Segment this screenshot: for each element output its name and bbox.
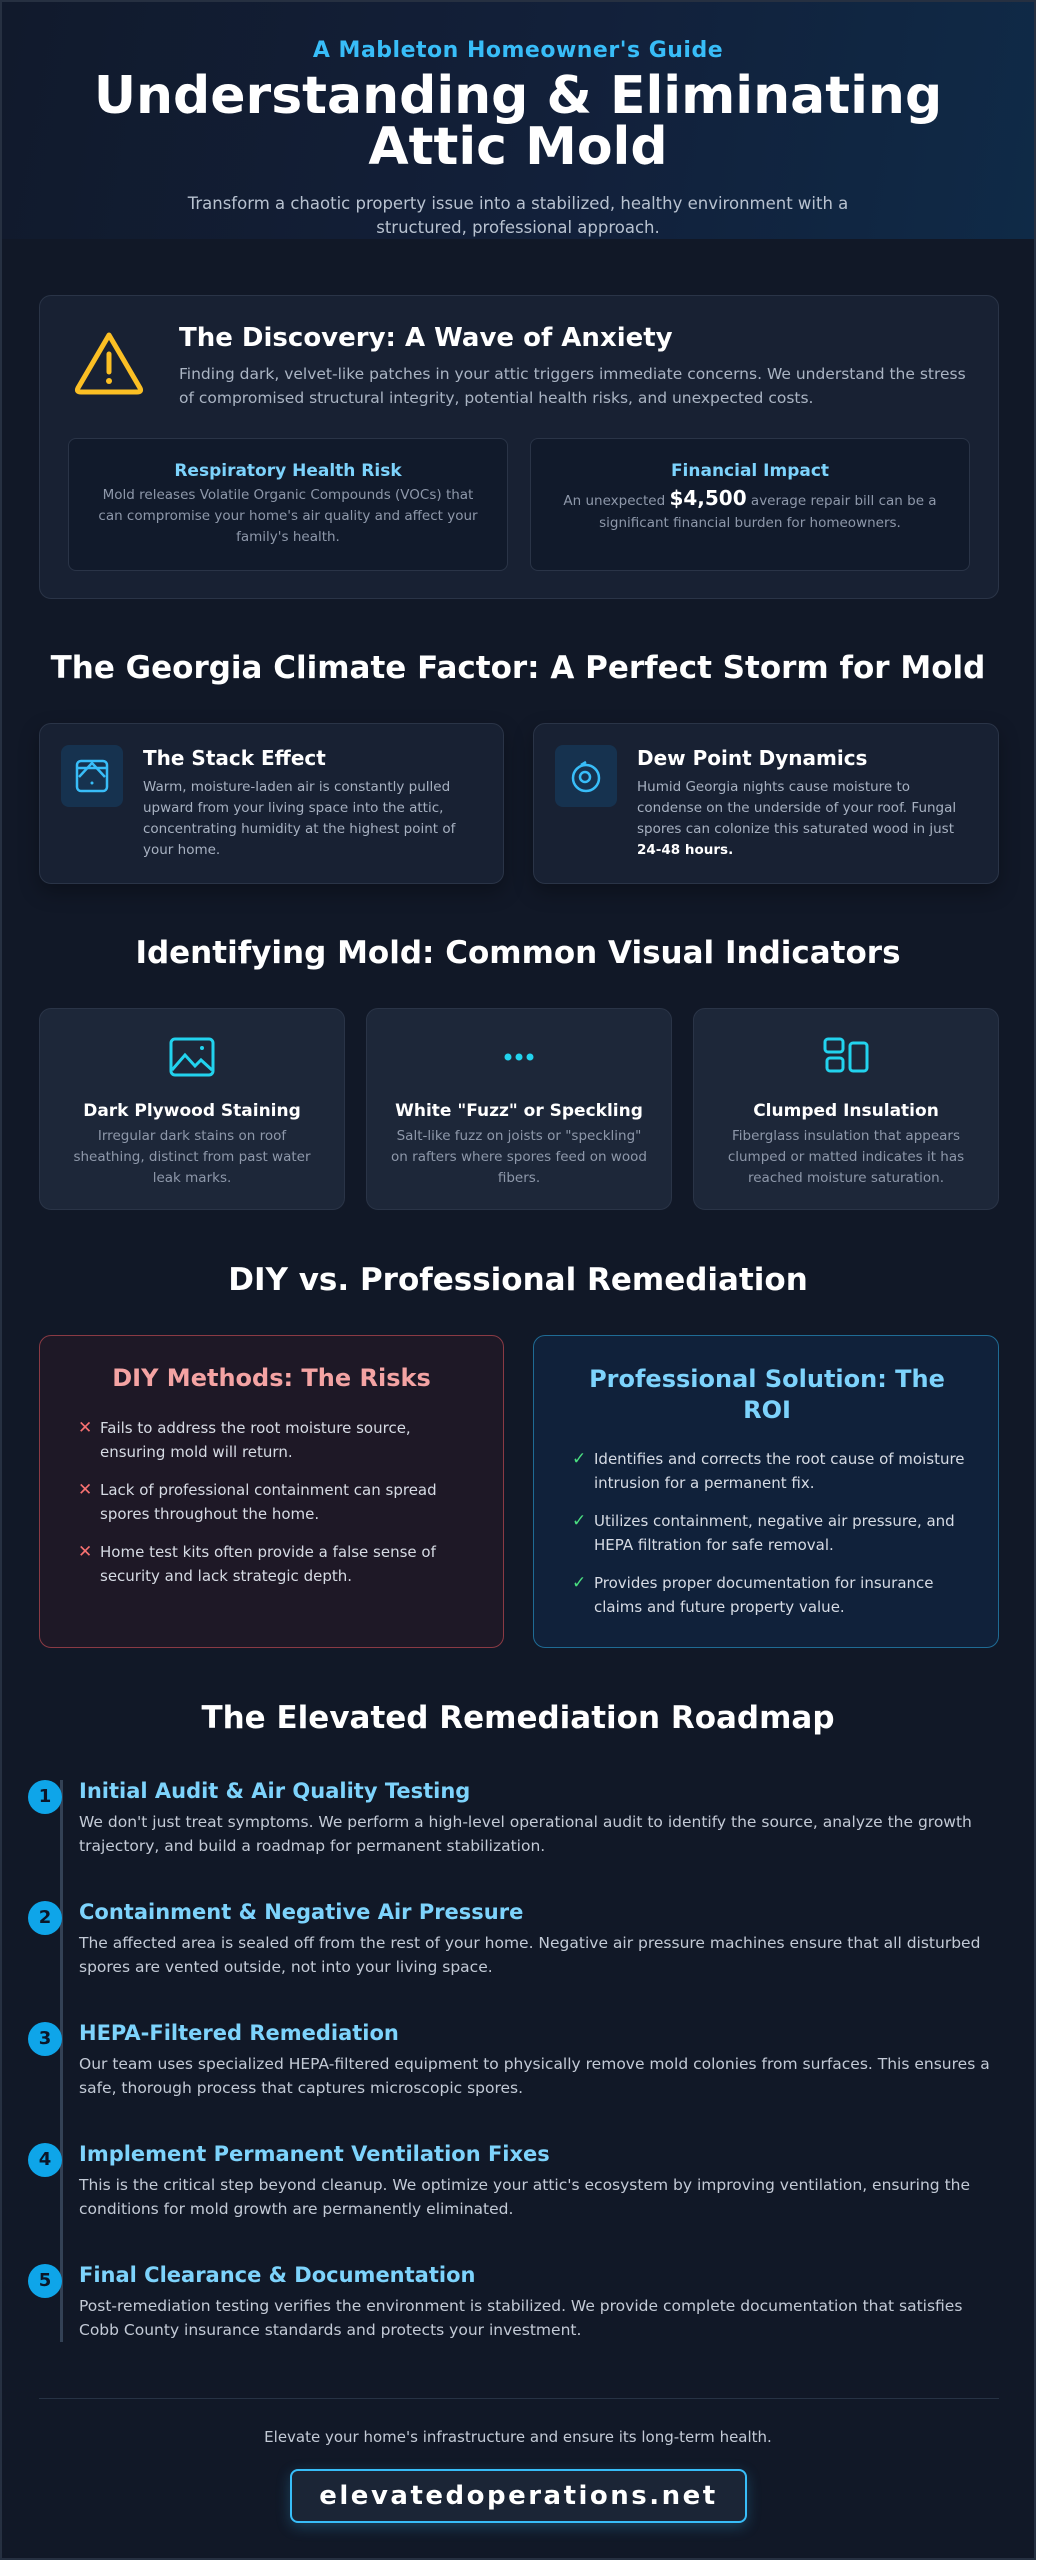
sub-card: respiratory risk	[68, 438, 508, 571]
title: fuzz: White "Fuzz" or Speckling	[395, 1101, 643, 1121]
heading: georgia climate: The Georgia Climate Factor: A Perfect Storm for Mold	[51, 650, 985, 686]
text: dew point: Humid Georgia nights cause moisture to condense on the underside of your roof. Fungal spores can colonize this saturated wood in just 24-48 hours.	[637, 779, 956, 858]
list: DIY risks: Fails to address the root moisture source, ensuring mold will return.	[100, 1419, 411, 1461]
panel: white fuzz	[366, 1008, 672, 1210]
text: stack effect: Warm, moisture-laden air is constantly pulled upward from your living space into the attic, concentrating humidity at the highest point of your home.	[143, 779, 455, 858]
list: professional benefits: ✓	[572, 1449, 586, 1469]
heading: roadmap: The Elevated Remediation Roadmap	[201, 1700, 835, 1736]
sub-card: respiratory risk: Mold releases Volatile Organic Compounds (VOCs) that can compromise your home's air quality and affect your family's health.	[98, 487, 478, 545]
title: Attic Mold	[368, 117, 668, 177]
step 4	[28, 2142, 970, 2218]
step 2: 2	[39, 1907, 51, 1928]
panel: professional ROI	[533, 1335, 999, 1648]
step 4: 4	[39, 2149, 51, 2170]
list: DIY risks: ✕	[78, 1480, 92, 1500]
title: dew point: Dew Point Dynamics	[637, 746, 867, 770]
footer button: website: elevatedoperations.net	[319, 2481, 718, 2511]
footer button: website	[290, 2469, 747, 2523]
list: DIY risks: Lack of professional containment can spread spores throughout the home.	[100, 1481, 437, 1523]
step 3	[28, 2021, 990, 2097]
step 1	[28, 1779, 972, 1855]
panel: discovery	[39, 295, 999, 599]
list: DIY risks: Home test kits often provide a false sense of security and lack strategic depth.	[100, 1543, 436, 1585]
heading: discovery: The Discovery: A Wave of Anxiety	[179, 323, 673, 353]
title: stack effect: The Stack Effect	[143, 746, 326, 770]
list: professional benefits: Provides proper documentation for insurance claims and future property value.	[594, 1574, 934, 1616]
list: professional benefits	[572, 1449, 965, 1616]
kicker: homeowner's guide: A Mableton Homeowner's Guide	[313, 38, 723, 63]
step 2: The affected area is sealed off from the rest of your home. Negative air pressure machines ensure that all disturbed spores are vented outside, not into your living space.	[79, 1934, 980, 1976]
icon: blocks	[824, 1038, 868, 1072]
panel: dark plywood staining	[39, 1008, 345, 1210]
sub-card: financial impact	[530, 438, 970, 571]
step 3: 3	[39, 2028, 51, 2049]
list: DIY risks: ✕	[78, 1542, 92, 1562]
timeline line	[60, 1780, 63, 2342]
step 2: Containment & Negative Air Pressure	[79, 1900, 523, 1924]
header band	[2, 2, 1034, 239]
step 1: Initial Audit & Air Quality Testing	[79, 1779, 470, 1803]
heading: identifying mold: Identifying Mold: Common Visual Indicators	[135, 935, 901, 971]
list: professional benefits: Utilizes containment, negative air pressure, and HEPA filtration for safe removal.	[594, 1512, 955, 1554]
list: professional benefits: Identifies and corrects the root cause of moisture intrusion for a permanent fix.	[594, 1450, 965, 1492]
sub-card: respiratory risk: Respiratory Health Risk	[174, 461, 402, 481]
step 4: Implement Permanent Ventilation Fixes	[79, 2142, 550, 2166]
text: plywood: Irregular dark stains on roof sheathing, distinct from past water leak marks.	[73, 1128, 311, 1186]
step 5	[28, 2263, 962, 2339]
step 2	[28, 1900, 980, 1976]
step 5: Final Clearance & Documentation	[79, 2263, 475, 2287]
title: Understanding & Eliminating	[94, 66, 942, 126]
text: insulation: Fiberglass insulation that appears clumped or matted indicates it has reached moisture saturation.	[728, 1128, 964, 1186]
step 3: Our team uses specialized HEPA-filtered equipment to physically remove mold colonies from surfaces. This ensures a safe, thorough process that captures microscopic spores.	[79, 2055, 990, 2097]
list: professional benefits: ✓	[572, 1511, 586, 1531]
list: professional benefits: ✓	[572, 1573, 586, 1593]
step 1: 1	[39, 1786, 51, 1807]
step 4: This is the critical step beyond cleanup. We optimize your attic's ecosystem by improving ventilation, ensuring the conditions for mold growth are permanently eliminated.	[79, 2176, 970, 2218]
panel: dew point	[533, 723, 999, 884]
icon: dots	[504, 1054, 534, 1060]
sub-card: financial impact: Financial Impact	[671, 461, 829, 481]
panel: stack effect	[39, 723, 504, 884]
icon: image	[170, 1038, 214, 1076]
title: plywood: Dark Plywood Staining	[83, 1101, 301, 1121]
step 3: HEPA-Filtered Remediation	[79, 2021, 399, 2045]
step 1: We don't just treat symptoms. We perform a high-level operational audit to identify the source, analyze the growth trajectory, and build a roadmap for permanent stabilization.	[79, 1813, 972, 1855]
title: insulation: Clumped Insulation	[753, 1101, 939, 1121]
title	[94, 66, 942, 177]
list: DIY risks: ✕	[78, 1418, 92, 1438]
title: professional: Professional Solution: The ROI	[589, 1365, 945, 1424]
panel: DIY risks	[39, 1335, 504, 1648]
footer text: Elevate your home's infrastructure and ensure its long-term health.	[264, 2428, 772, 2446]
text: discovery description: Finding dark, velvet-like patches in your attic triggers immediate concerns. We understand the stress of compromised structural integrity, potential health risks, and unexpected costs.	[179, 365, 966, 407]
icon: dew point	[555, 745, 617, 807]
icon: stack effect	[61, 745, 123, 807]
step 5: Post-remediation testing verifies the environment is stabilized. We provide complete documentation that satisfies Cobb County insurance standards and protects your investment.	[79, 2297, 962, 2339]
heading: DIY vs professional: DIY vs. Professional Remediation	[228, 1262, 808, 1298]
step 5: 5	[39, 2270, 51, 2291]
list: DIY risks	[78, 1418, 437, 1585]
title: DIY: DIY Methods: The Risks	[112, 1364, 431, 1392]
text: fuzz: Salt-like fuzz on joists or "speckling" on rafters where spores feed on wood fibers.	[391, 1128, 647, 1186]
tagline: Transform a chaotic property issue into a stabilized, healthy environment with a structured, professional approach.	[188, 194, 848, 237]
sub-card: financial impact: An unexpected $4,500 average repair bill can be a significant financial burden for homeowners.	[563, 486, 937, 531]
icon: warning triangle	[74, 332, 144, 394]
panel: clumped insulation	[693, 1008, 999, 1210]
